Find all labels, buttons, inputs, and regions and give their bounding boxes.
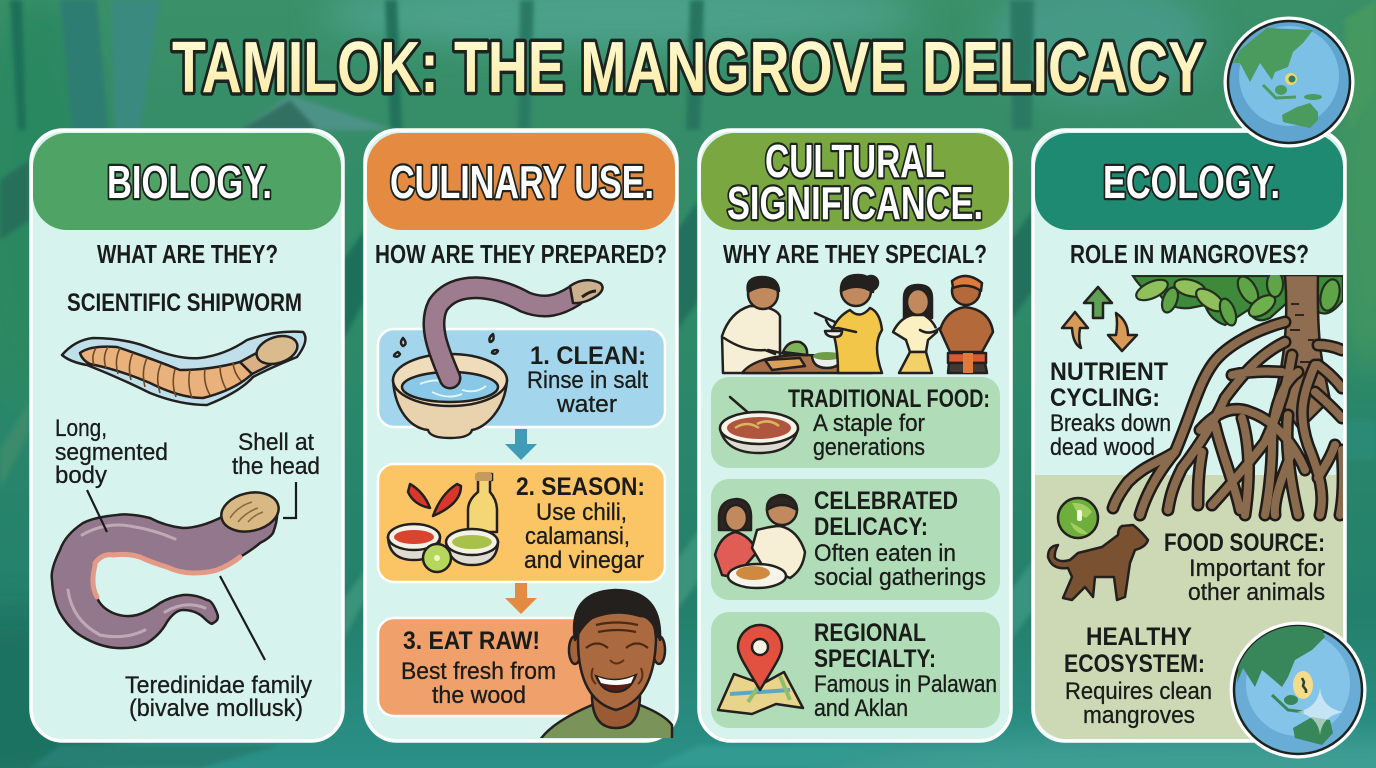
biology subtitle: SCIENTIFIC SHIPWORM bbox=[67, 289, 302, 317]
regional specialty text: REGIONAL bbox=[814, 619, 926, 647]
step 3 text: Best fresh from bbox=[401, 658, 556, 685]
panel: cultural significance bbox=[699, 130, 1011, 741]
step 3 text: the wood bbox=[432, 682, 526, 709]
label: teredinidae family: (bivalve mollusk) bbox=[129, 695, 303, 722]
tree foliage bbox=[1133, 271, 1343, 328]
arrow: season to eat bbox=[505, 583, 537, 614]
step 1 text: Rinse in salt bbox=[527, 367, 648, 394]
celebrated delicacy text: Often eaten in bbox=[814, 540, 956, 567]
cultural question: WHY ARE THEY SPECIAL? bbox=[723, 239, 987, 269]
nutrient cycling text: NUTRIENT bbox=[1050, 358, 1168, 386]
regional specialty text: Famous in Palawan bbox=[814, 671, 997, 698]
card: celebrated delicacy bbox=[711, 479, 1000, 600]
nutrient cycling text: dead wood bbox=[1050, 434, 1155, 461]
card: regional specialty bbox=[711, 612, 1001, 728]
cultural heading: SIGNIFICANCE. bbox=[727, 177, 983, 229]
arrow: clean to season bbox=[505, 429, 537, 460]
panel: biology bbox=[31, 130, 343, 741]
illustration: people sharing food bbox=[722, 275, 993, 373]
illustration: mangrove tree bbox=[1113, 271, 1343, 515]
label: shell at the head: Shell at bbox=[238, 429, 314, 456]
healthy ecosystem text: HEALTHY bbox=[1086, 623, 1192, 651]
ecology ground bbox=[1035, 475, 1343, 739]
food source text: Important for bbox=[1189, 555, 1325, 582]
celebrated delicacy text: social gatherings bbox=[814, 564, 986, 591]
ecology header bbox=[1035, 133, 1343, 230]
healthy ecosystem text: Requires clean bbox=[1065, 678, 1212, 705]
label: shell at the head: the head bbox=[232, 453, 320, 480]
food source text: FOOD SOURCE: bbox=[1164, 529, 1325, 557]
illustration: condiments bbox=[388, 473, 498, 572]
step 2 text: Use chili, bbox=[536, 499, 627, 526]
healthy ecosystem text: mangroves bbox=[1083, 702, 1195, 729]
icon: green fruit bbox=[1058, 498, 1098, 538]
culinary question: HOW ARE THEY PREPARED? bbox=[375, 239, 667, 269]
illustration: smiling man bbox=[540, 590, 672, 745]
label: long segmented body: segmented bbox=[55, 439, 168, 466]
illustration: tamilok worm bbox=[52, 487, 282, 648]
step 2 text: 2. SEASON: bbox=[516, 473, 645, 501]
icon: map with pin bbox=[718, 625, 803, 714]
regional specialty text: and Aklan bbox=[814, 695, 908, 722]
icon: globe top right bbox=[1224, 16, 1354, 148]
biology question: WHAT ARE THEY? bbox=[97, 239, 278, 269]
icon: bowl of food bbox=[720, 397, 798, 453]
traditional food text: generations bbox=[813, 434, 925, 461]
illustration: worm rinsed in bowl bbox=[434, 280, 603, 378]
regional specialty text: SPECIALTY: bbox=[814, 645, 936, 673]
step 1 text: 1. CLEAN: bbox=[530, 342, 646, 370]
step 2 box bbox=[378, 464, 665, 582]
step 1 box bbox=[378, 329, 665, 427]
panel: ecology bbox=[1033, 130, 1345, 741]
illustration: shipworm in tube bbox=[62, 331, 305, 405]
label: long segmented body: Long, bbox=[55, 415, 107, 442]
icon: couple eating bbox=[715, 495, 805, 588]
nutrient cycling text: CYCLING: bbox=[1050, 384, 1160, 412]
celebrated delicacy text: CELEBRATED bbox=[814, 487, 958, 515]
illustration: bowl of water bbox=[393, 334, 507, 438]
card: traditional food bbox=[711, 377, 1000, 468]
icon: animal bbox=[1048, 525, 1148, 600]
step 3 text: 3. EAT RAW! bbox=[403, 627, 540, 655]
step 3 box bbox=[378, 618, 618, 716]
panel: culinary use bbox=[365, 130, 677, 745]
label: long segmented body: body bbox=[55, 462, 107, 489]
ecology heading: ECOLOGY. bbox=[1103, 156, 1280, 208]
leader lines bbox=[87, 482, 296, 660]
biology header bbox=[33, 133, 341, 230]
healthy ecosystem text: ECOSYSTEM: bbox=[1064, 650, 1205, 678]
cultural header bbox=[701, 133, 1009, 230]
biology heading: BIOLOGY. bbox=[107, 156, 272, 208]
icon: globe bottom right bbox=[1230, 620, 1366, 758]
traditional food text: TRADITIONAL FOOD: bbox=[788, 385, 990, 413]
step 2 text: and vinegar bbox=[524, 547, 644, 574]
celebrated delicacy text: DELICACY: bbox=[814, 513, 928, 541]
cultural heading: CULTURAL bbox=[765, 135, 945, 187]
icon: nutrient cycle arrows bbox=[1062, 287, 1137, 351]
food source text: other animals bbox=[1188, 579, 1325, 606]
label: teredinidae family: Teredinidae family bbox=[125, 672, 312, 699]
culinary header bbox=[367, 133, 675, 230]
nutrient cycling text: Breaks down bbox=[1050, 410, 1171, 437]
traditional food text: A staple for bbox=[813, 410, 925, 437]
ecology question: ROLE IN MANGROVES? bbox=[1070, 239, 1309, 269]
step 2 text: calamansi, bbox=[525, 523, 630, 550]
culinary heading: CULINARY USE. bbox=[390, 156, 654, 208]
step 1 text: water bbox=[556, 391, 617, 418]
